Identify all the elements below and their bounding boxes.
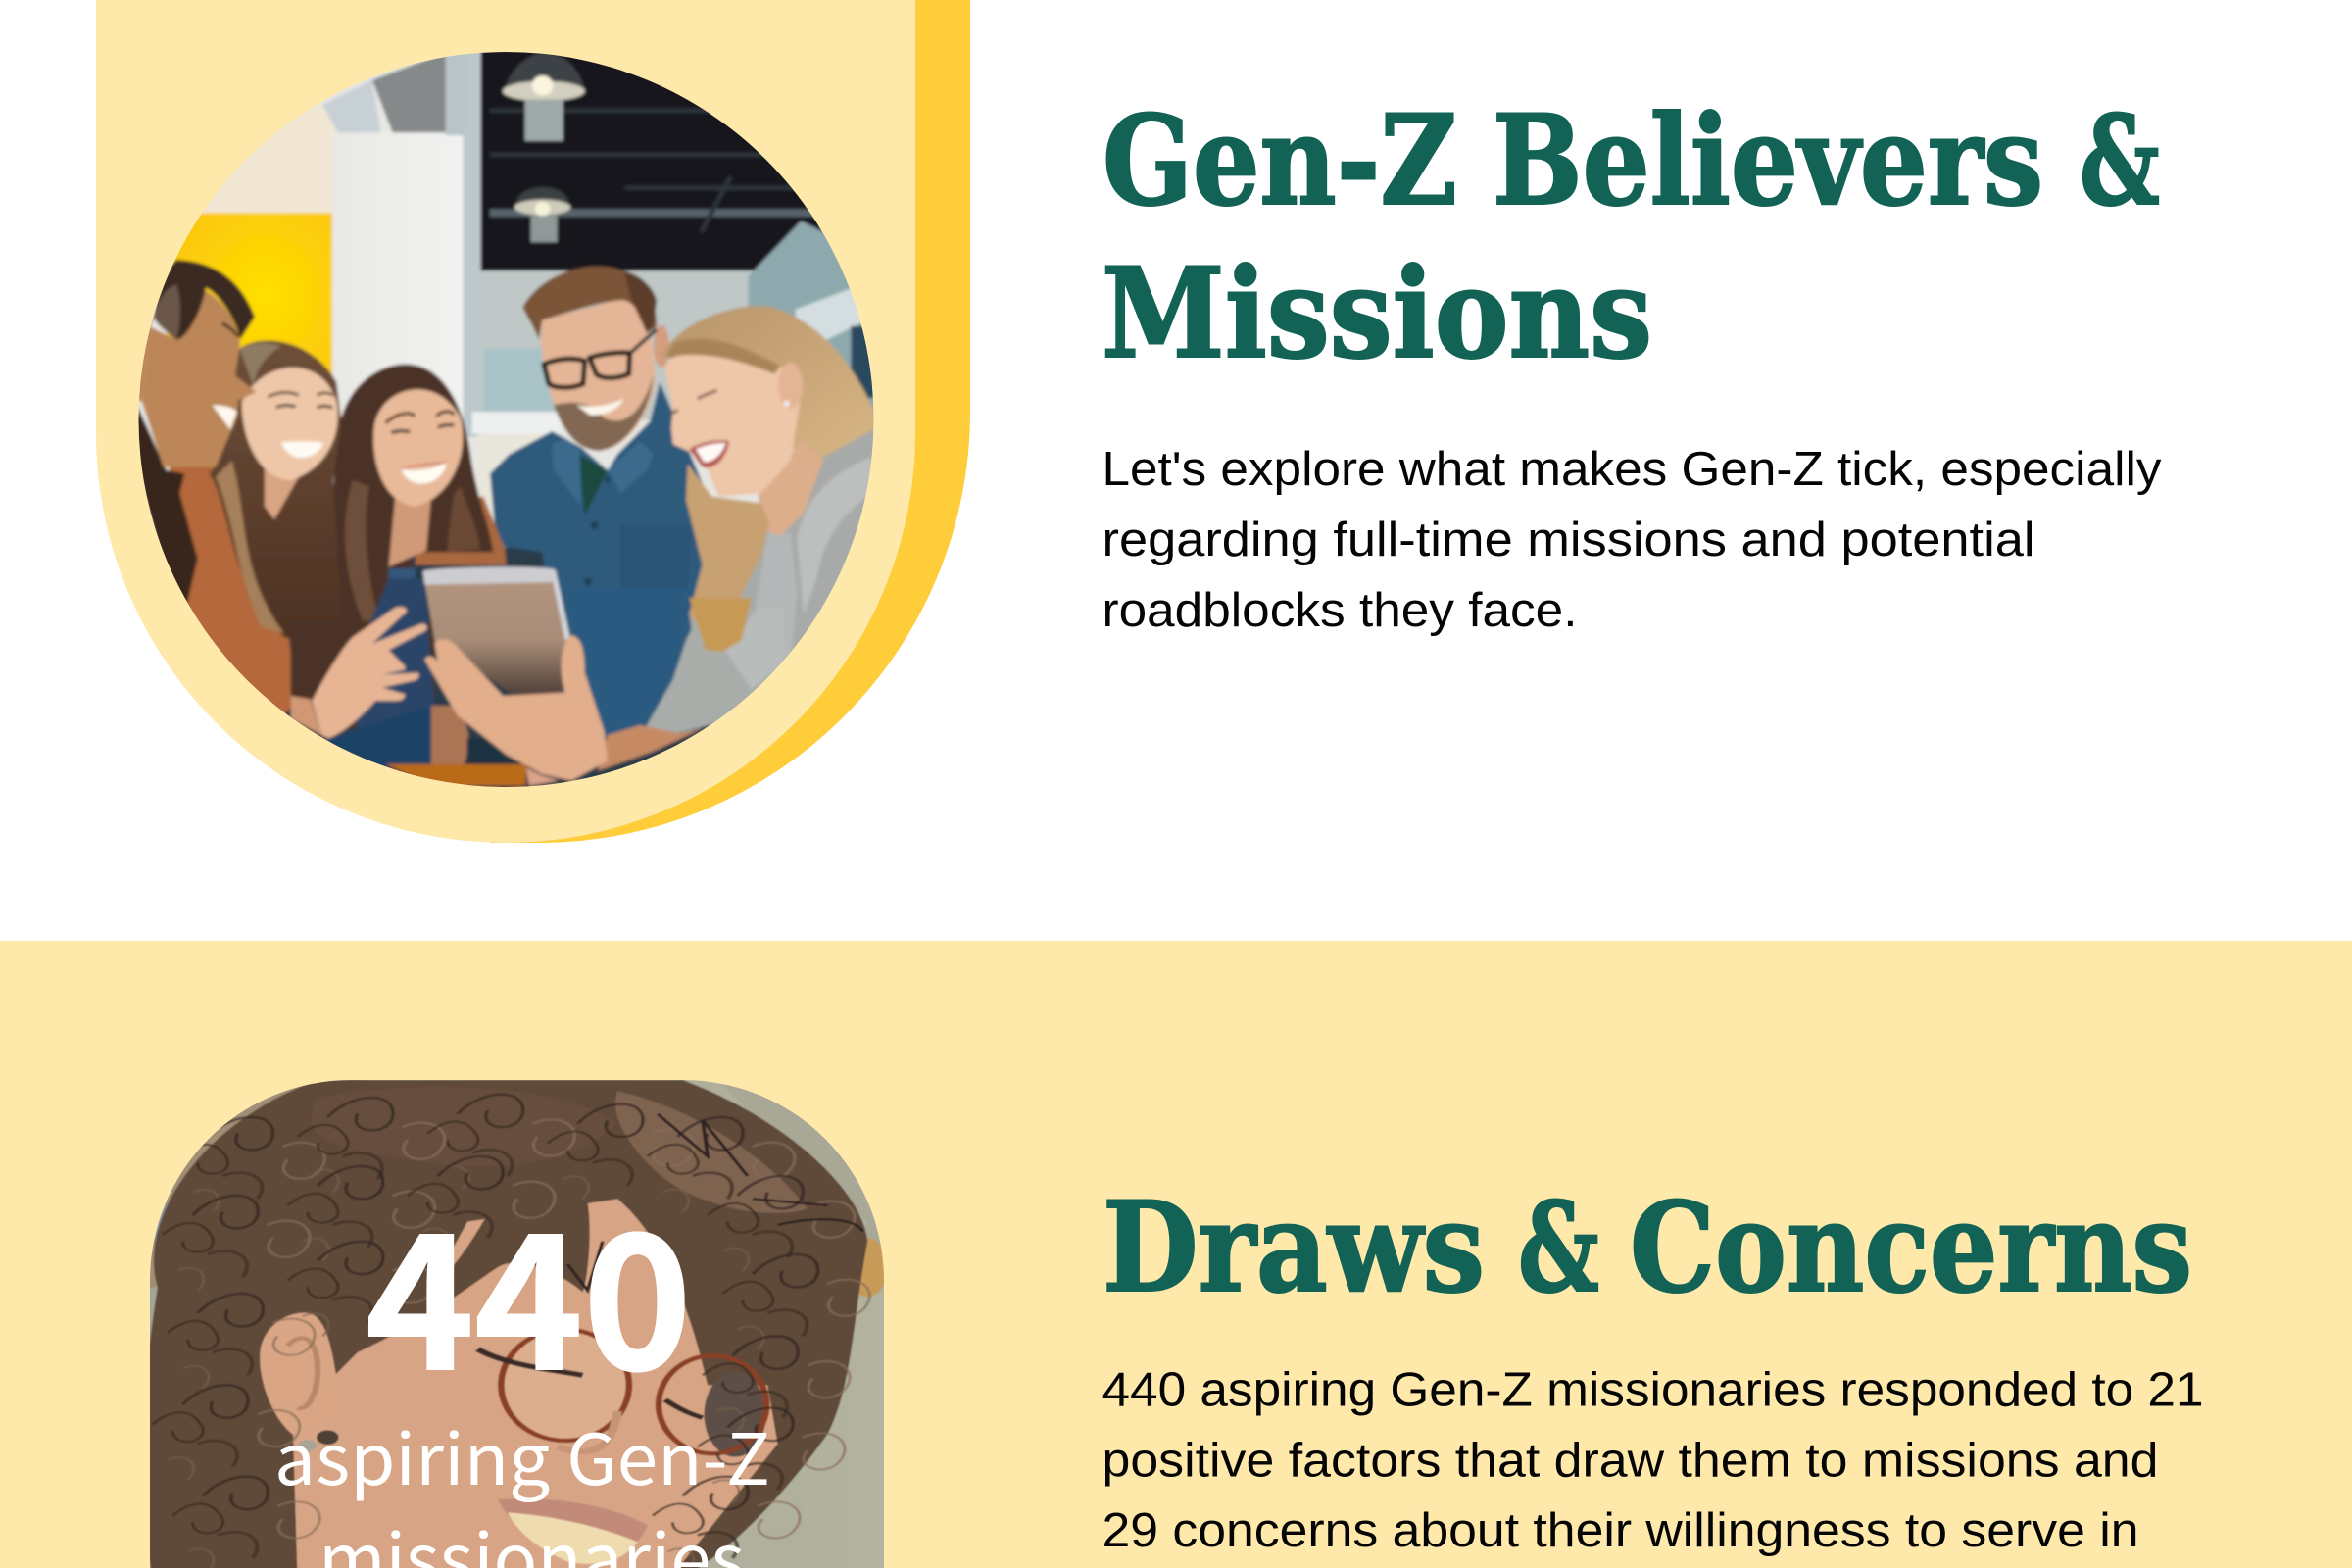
photo: group of friends with tablet [131,50,902,796]
statistic: 440: 440 [366,1153,692,1423]
intro paragraph [1102,443,2162,637]
lower photo area: tablet, hands, clothing, table [291,567,784,786]
third woman, long brown hair [330,363,510,622]
section: draws and concerns band [0,941,2352,1568]
heading: Draws & Concerns: Draws [1102,1175,1485,1320]
intro paragraph: Let's explore what makes Gen-Z tick, especially [1102,443,2162,496]
blonde woman laughing [659,304,874,735]
panel: photo with 440 statistic [143,1075,893,1568]
heading: Gen-Z Believers & Missions: Gen-Z [1102,88,1457,233]
photo: smiling woman with curly hair and round glasses [143,1075,893,1568]
statistic caption: aspiring Gen-Z [274,1402,770,1505]
survey paragraph: 29 concerns about their willingness to serve in [1102,1504,2138,1557]
heading: Gen-Z Believers & Missions: Missions [1102,241,1652,386]
man with glasses [490,267,712,735]
heading: Gen-Z Believers & Missions: Believers [1493,88,2043,233]
survey paragraph: positive factors that draw them to missions and [1102,1435,2158,1488]
heading: Draws & Concerns: Concerns [1630,1175,2192,1320]
section: hero with group photo [96,0,970,843]
intro paragraph: regarding full-time missions and potential [1102,514,2034,566]
heading: Gen-Z Believers & Missions [1102,88,2160,386]
survey paragraph [1102,1364,2203,1557]
gold backing shape [490,0,970,843]
pale yellow drop shape [96,0,915,843]
heading: Draws & Concerns [1102,1175,2192,1320]
first person, profile at left edge [134,260,257,608]
survey paragraph: 440 aspiring Gen-Z missionaries responded to 21 [1102,1364,2203,1417]
intro paragraph: roadblocks they face. [1102,584,1578,637]
second woman, terracotta top [160,341,343,728]
statistic caption [274,1402,770,1568]
three women on the left [134,260,507,728]
heading: Gen-Z Believers & Missions: & [2080,88,2160,233]
photo background: office interior [131,50,883,796]
heading: Draws & Concerns: & [1518,1175,1599,1320]
